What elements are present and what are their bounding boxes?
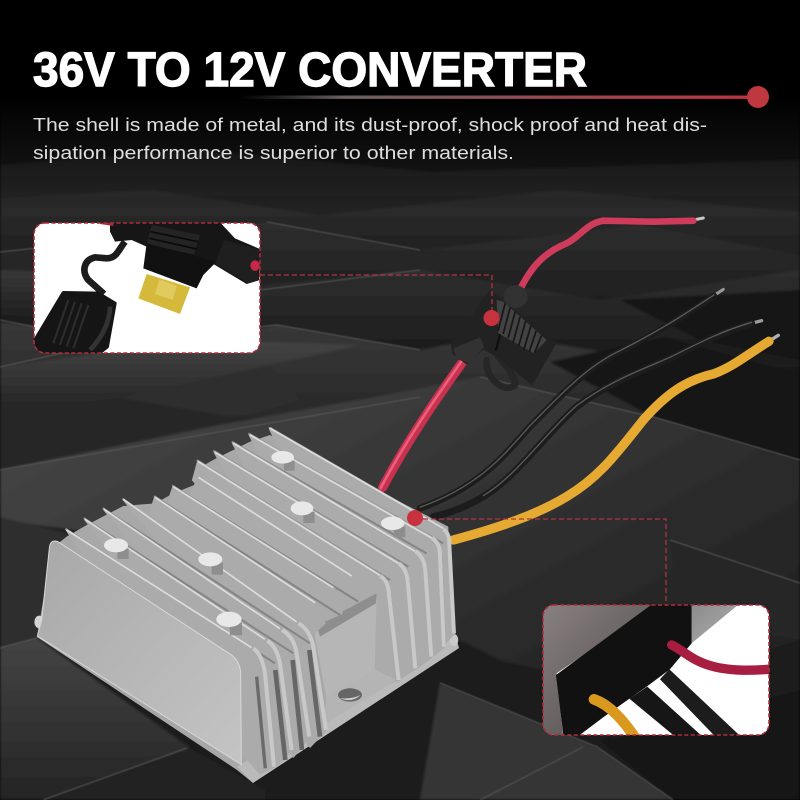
background top fade — [0, 0, 800, 210]
black wire one — [420, 289, 723, 508]
front end plate — [37, 541, 241, 765]
title rule with red end dot — [240, 86, 769, 108]
product: wires — [381, 218, 778, 540]
housing silhouette and base flange — [34, 435, 459, 783]
callout: fuse holder — [34, 220, 261, 353]
description text: The shell is made of metal, and its dust-proof, shock proof and heat dis- — [33, 114, 707, 135]
rear fin group — [193, 428, 454, 687]
description text: sipation performance is superior to other materials. — [33, 142, 514, 163]
yellow wire — [453, 335, 778, 540]
screw posts — [104, 451, 405, 635]
product: aluminium converter body — [34, 428, 459, 783]
central recessed box and mounting hole — [313, 593, 397, 725]
title: 36V TO 12V CONVERTER — [33, 43, 587, 97]
inline fuse holder — [452, 285, 555, 388]
description text — [33, 114, 707, 163]
front fin group — [65, 499, 326, 773]
black wire two — [433, 321, 762, 517]
background ridge highlights — [0, 222, 800, 800]
callout: wire exit detail — [540, 603, 769, 740]
callout image: fuse and cap — [35, 220, 261, 353]
short inner fins — [150, 477, 360, 633]
connector: wire exit callout to body — [407, 510, 666, 605]
red wire — [381, 218, 703, 488]
connector: fuse callout to fuse holder — [260, 275, 500, 326]
